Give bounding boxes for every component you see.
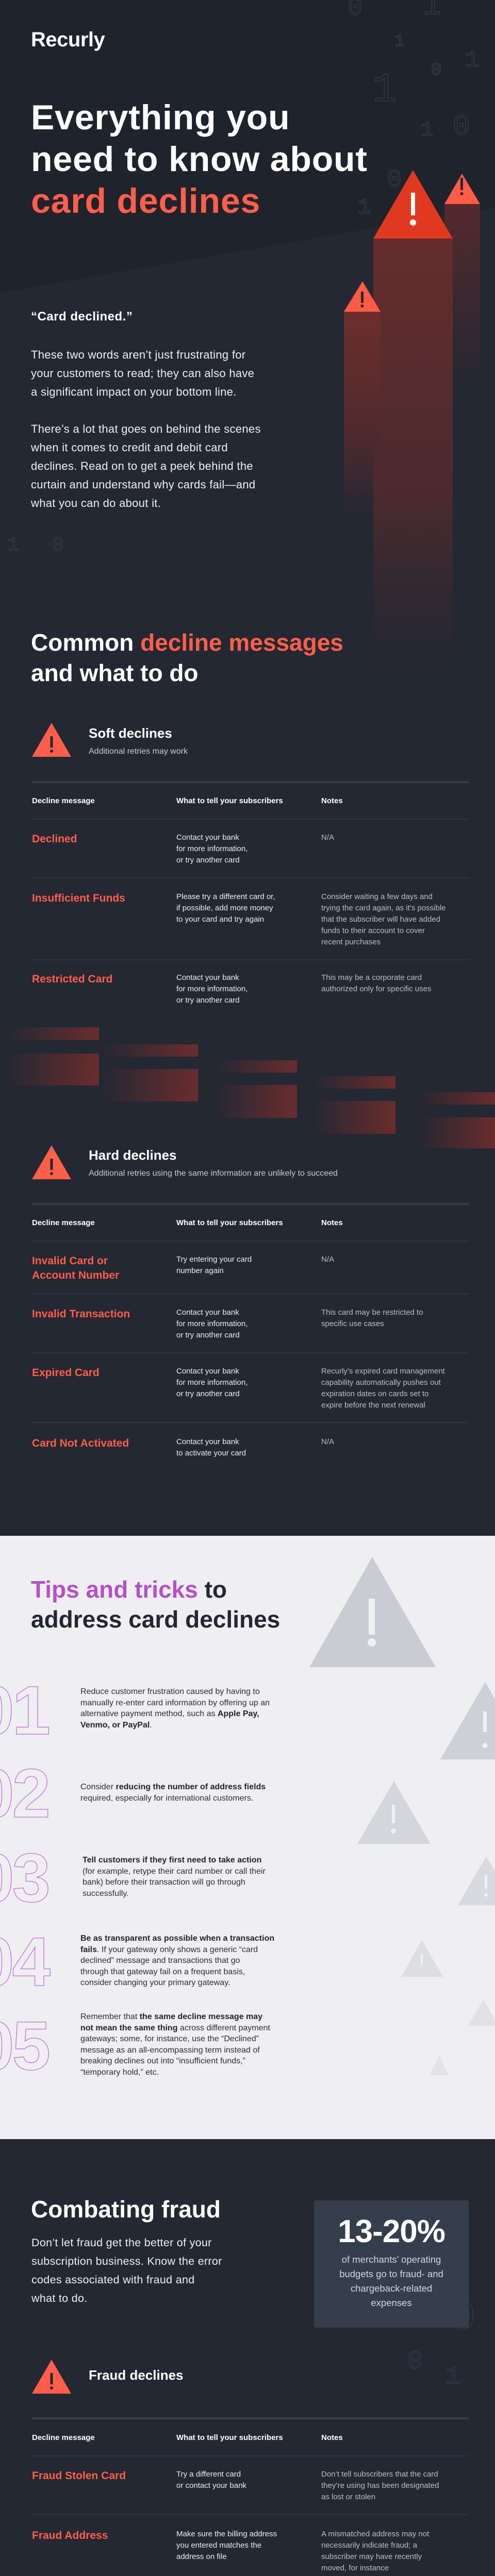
stat callout: 13-20%: [314, 2200, 469, 2328]
row: Invalid Transaction: [32, 1308, 423, 1340]
row: Invalid Transaction: Contact your bank: [176, 1308, 239, 1317]
title: need to know about: [31, 140, 368, 179]
tip 01: Reduce customer frustration caused by having to: [80, 1687, 260, 1696]
fraud intro text: Don’t let fraud get the better of your: [31, 2236, 212, 2249]
soft table: Decline message: [32, 796, 95, 805]
row: Insufficient Funds: Insufficient Funds: [32, 892, 125, 904]
row: Expired Card: expiration dates on cards set to: [321, 1389, 428, 1398]
row: Insufficient Funds: Consider waiting a few days and: [321, 892, 433, 901]
tip 04: Be as transparent as possible when a transaction: [80, 1934, 274, 1943]
decorative gray triangles: [309, 1557, 495, 2075]
row: Restricted Card: This may be a corporate card: [321, 973, 422, 982]
panel: hard declines: [32, 1145, 338, 1179]
tip 04: [0, 1934, 274, 1987]
row: Expired Card: or try another card: [176, 1389, 240, 1398]
heading: common decline messages: [31, 629, 343, 686]
row: Insufficient Funds: trying the card again, as it’s possible: [321, 904, 446, 912]
row: Expired Card: [32, 1367, 445, 1410]
tip 04: consider changing your primary gateway.: [80, 1978, 230, 1987]
row: Restricted Card: authorized only for specific uses: [321, 985, 431, 993]
row: Invalid Card: Try entering your card: [176, 1255, 252, 1264]
fraud table: Decline message: [32, 2433, 95, 2442]
soft declines subtitle: Additional retries may work: [89, 747, 188, 756]
row: Card Not Activated: N/A: [321, 1437, 334, 1446]
title: Everything you: [31, 98, 290, 137]
tip 05: message as an all-encompassing term instead of: [80, 2045, 260, 2055]
row: Restricted Card: [32, 973, 431, 1005]
row: Insufficient Funds: recent purchases: [321, 938, 381, 946]
panel: fraud declines: [32, 2360, 184, 2394]
tip 05: [0, 2012, 270, 2076]
row: Restricted Card: for more information,: [176, 985, 248, 993]
row: Fraud Stolen Card: Fraud Stolen Card: [32, 2470, 126, 2482]
fraud table: What to tell your subscribers: [176, 2433, 283, 2442]
fraud table: Notes: [321, 2433, 343, 2442]
row: Invalid Card: N/A: [321, 1255, 334, 1264]
panel: soft declines: [32, 723, 188, 757]
row: Fraud Address: [32, 2530, 429, 2572]
row: Invalid Card: number again: [176, 1266, 224, 1275]
row: Fraud Address: address on file: [176, 2552, 227, 2561]
row: Insufficient Funds: [32, 892, 446, 946]
row: Declined: or try another card: [176, 856, 240, 865]
hard declines heading: Hard declines: [89, 1147, 177, 1163]
row: Fraud Address: A mismatched address may not: [321, 2530, 429, 2538]
tip 03: successfully.: [82, 1889, 129, 1898]
intro text: a significant impact on your bottom line.: [31, 385, 237, 398]
soft table: Notes: [321, 796, 343, 805]
row: Fraud Address: Fraud Address: [32, 2530, 108, 2541]
tip 01: manually re-enter card information by offering up an: [80, 1698, 270, 1707]
row: Fraud Stolen Card: they’re using has been designated: [321, 2481, 439, 2490]
row: Declined: Declined: [32, 833, 77, 845]
soft table: [32, 796, 469, 1005]
row: Insufficient Funds: if possible, add more money: [176, 904, 273, 912]
heading: combating fraud: Combating fraud: [31, 2196, 221, 2223]
intro text: what you can do about it.: [31, 497, 161, 510]
fraud intro text: what to do.: [31, 2292, 87, 2304]
tip 03: [0, 1853, 266, 1903]
tip 05: breaking declines out into “insufficient funds,”: [80, 2057, 245, 2065]
row: Insufficient Funds: funds to their account to cover: [321, 926, 425, 935]
logo: Recurly: Recurly: [31, 28, 105, 51]
intro text: your customers to read; they can also have: [31, 367, 254, 380]
tip 01: Venmo, or PayPal.: [80, 1721, 152, 1729]
decorative red stair bars: [15, 1027, 495, 1148]
tip 04: fails. If your gateway only shows a generic “card: [80, 1945, 258, 1954]
row: Invalid Transaction: for more information,: [176, 1319, 248, 1328]
row: Fraud Stolen Card: [32, 2470, 439, 2501]
row: Restricted Card: Restricted Card: [32, 973, 112, 985]
row: Invalid Card: Invalid Card or: [32, 1255, 108, 1267]
illustration: warning pillars: [344, 170, 480, 625]
row: Fraud Address: Make sure the billing address: [176, 2530, 277, 2538]
tip 05: Remember that the same decline message may: [80, 2012, 262, 2021]
intro text: declines. Read on to get a peek behind the: [31, 460, 253, 472]
row: Fraud Stolen Card: or contact your bank: [176, 2481, 246, 2490]
row: Fraud Address: necessarily indicate fraud; a: [321, 2541, 417, 2550]
title: card declines: [31, 181, 260, 221]
row: Fraud Stolen Card: as lost or stolen: [321, 2493, 375, 2501]
row: Expired Card: expire before the next renewal: [321, 1401, 425, 1410]
intro text: [31, 310, 261, 510]
hard table: [32, 1218, 469, 1458]
row: Restricted Card: or try another card: [176, 996, 240, 1005]
row: Fraud Address: you entered matches the: [176, 2541, 261, 2550]
row: Expired Card: Expired Card: [32, 1367, 100, 1379]
row: Fraud Stolen Card: Don’t tell subscribers that the card: [321, 2470, 438, 2479]
row: Insufficient Funds: Please try a different card or,: [176, 892, 275, 901]
tip 01: [0, 1686, 270, 1735]
tip 05: “temporary hold,” etc.: [80, 2068, 159, 2076]
intro text: “Card declined.”: [31, 310, 133, 324]
icon: fraud warning triangle: [32, 2360, 71, 2394]
heading: tips and tricks: address card declines: [31, 1606, 280, 1633]
row: Invalid Transaction: specific use cases: [321, 1319, 384, 1328]
row: Card Not Activated: [32, 1437, 334, 1458]
row: Card Not Activated: Card Not Activated: [32, 1437, 129, 1449]
heading: common decline messages: and what to do: [31, 659, 199, 686]
soft table: What to tell your subscribers: [176, 796, 283, 805]
row: Declined: [32, 833, 334, 865]
soft declines heading: Soft declines: [89, 725, 172, 741]
row: Expired Card: capability automatically pushes out: [321, 1378, 441, 1387]
row: Invalid Transaction: or try another card: [176, 1331, 240, 1340]
stat callout: 13-20%: of merchants’ operating: [342, 2254, 441, 2265]
tip 02: required, especially for international customers.: [80, 1794, 253, 1802]
hard table: What to tell your subscribers: [176, 1218, 283, 1227]
stat callout: 13-20%: chargeback-related: [351, 2283, 432, 2294]
heading: tips and tricks: [31, 1576, 280, 1633]
icon: hard warning triangle: [32, 1145, 71, 1179]
background: top dark section: [0, 0, 495, 1536]
stat callout: 13-20%: budgets go to fraud- and: [339, 2268, 443, 2279]
heading: tips and tricks: Tips and tricks to: [31, 1576, 227, 1603]
row: Expired Card: Contact your bank: [176, 1367, 239, 1376]
tip 04: through that gateway fail on a frequent basis,: [80, 1967, 245, 1976]
row: Declined: Contact your bank: [176, 833, 239, 842]
tip 03: bank) before their transaction will go through: [82, 1878, 245, 1887]
decorative binary digits: [8, 0, 478, 551]
tip 02: [0, 1768, 266, 1818]
intro text: when it comes to credit and debit card: [31, 441, 228, 454]
tip 02: Consider reducing the number of address fields: [80, 1783, 266, 1791]
row: Declined: for more information,: [176, 844, 248, 853]
row: Restricted Card: Contact your bank: [176, 973, 239, 982]
tip 03: Tell customers if they first need to take action: [82, 1856, 261, 1865]
intro text: curtain and understand why cards fail—and: [31, 478, 255, 491]
hard table: Notes: [321, 1218, 343, 1227]
row: Invalid Card: [32, 1255, 334, 1281]
fraud declines heading: Fraud declines: [89, 2367, 184, 2383]
row: Insufficient Funds: that the subscriber will have added: [321, 915, 440, 924]
tip 03: (for example, retype their card number or call their: [82, 1867, 266, 1875]
tip 01: alternative payment method, such as Apple Pay,: [80, 1709, 259, 1718]
row: Declined: N/A: [321, 833, 334, 842]
hard table: Decline message: [32, 1218, 95, 1227]
row: Fraud Stolen Card: Try a different card: [176, 2470, 241, 2479]
row: Insufficient Funds: to your card and try again: [176, 915, 264, 924]
row: Expired Card: Recurly’s expired card management: [321, 1367, 445, 1376]
fraud intro text: codes associated with fraud and: [31, 2274, 194, 2286]
row: Expired Card: for more information,: [176, 1378, 248, 1387]
fraud table: [32, 2433, 469, 2572]
row: Fraud Address: subscriber may have recently: [321, 2552, 422, 2561]
title: [31, 98, 368, 221]
stat callout: 13-20%: 13-20%: [338, 2214, 445, 2249]
row: Invalid Transaction: This card may be restricted to: [321, 1308, 423, 1317]
tip 05: not mean the same thing across different payment: [80, 2024, 270, 2032]
section: fraud background: [0, 2139, 495, 2576]
tip 05: gateways; some, for instance, use the “Declined”: [80, 2035, 259, 2043]
icon: soft warning triangle: [32, 723, 71, 757]
tip 04: declined” message and transactions that go: [80, 1956, 240, 1965]
row: Card Not Activated: Contact your bank: [176, 1437, 239, 1446]
row: Invalid Transaction: Invalid Transaction: [32, 1308, 130, 1320]
stat callout: 13-20%: expenses: [371, 2297, 412, 2308]
fraud intro text: subscription business. Know the error: [31, 2255, 222, 2267]
heading: common decline messages: Common decline messages: [31, 629, 343, 656]
row: Card Not Activated: to activate your card: [176, 1449, 246, 1458]
intro text: These two words aren’t just frustrating for: [31, 348, 245, 361]
hard declines subtitle: Additional retries using the same information are unlikely to succeed: [89, 1169, 338, 1178]
intro text: There’s a lot that goes on behind the scenes: [31, 422, 261, 435]
row: Invalid Card: Account Number: [32, 1269, 119, 1281]
row: Fraud Address: moved, for instance: [321, 2564, 389, 2572]
section: tips background: [0, 1536, 495, 2139]
fraud intro text: [31, 2236, 222, 2304]
